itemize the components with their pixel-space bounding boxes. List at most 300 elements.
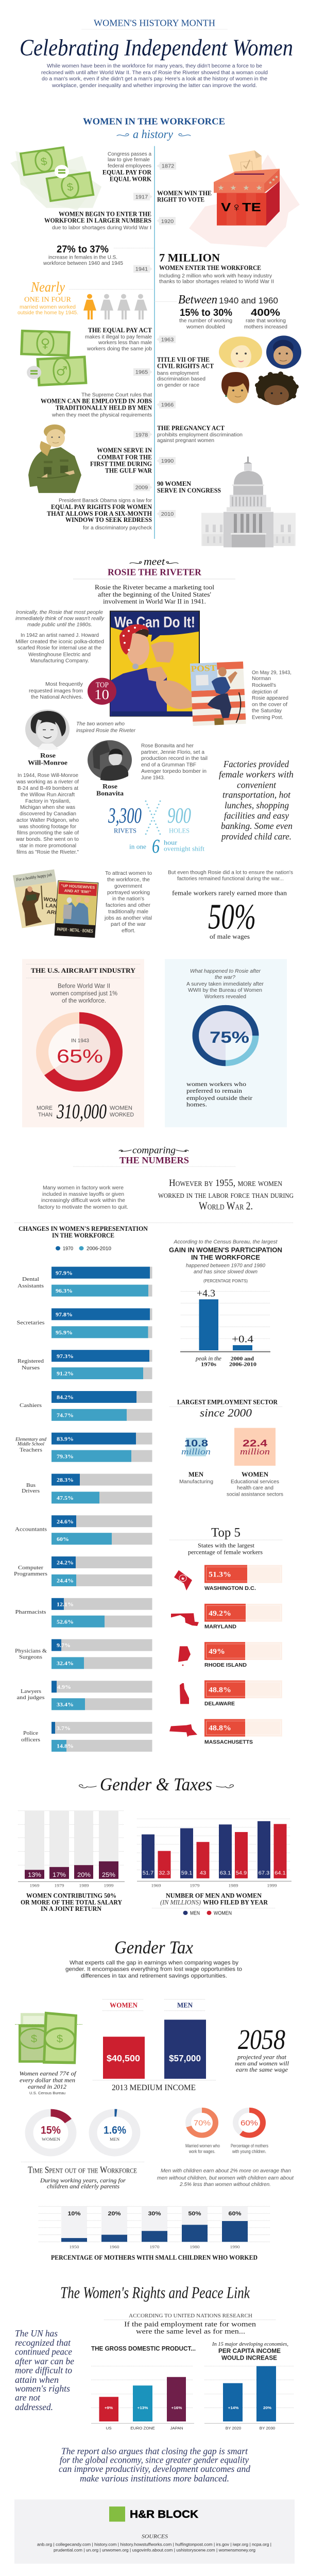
- text: attract women: the workforce, the: [107, 877, 150, 883]
- quote: un peace: attain when: [15, 2375, 59, 2385]
- bars: accountants: 60%: [57, 1536, 69, 1543]
- icon: capitol building: [201, 456, 296, 547]
- stat: men 10.8 million: Manufacturing: [179, 1479, 213, 1485]
- text: attract women: effort.: [122, 928, 135, 934]
- heading: gender tax: gender. It encompasses everything from lost wage opportunities to: [65, 1965, 242, 1973]
- chart: mothers who worked: 10%: [67, 2210, 81, 2217]
- chart: median income: 2013 MEDIUM INCOME: [112, 2083, 196, 2092]
- quote: factories: banking. Some even: [221, 821, 293, 831]
- timeline 2009: 90 WOMEN: [157, 480, 192, 487]
- chart: men and women filing: 54.9: [236, 1870, 247, 1876]
- heading: women in the workforce: [83, 116, 225, 141]
- text: national archives: requested images from: [29, 688, 83, 694]
- state: massachusetts: 48.8%: [209, 1724, 231, 1733]
- heading: meet rosie the riveter: Rosie the Riveter became a marketing tool: [95, 584, 214, 591]
- section: top 5 states: [169, 1525, 282, 1745]
- chart: participation gain: 2006-2010: [229, 1362, 256, 1367]
- timeline 1978: prohibits employment discrimination: [157, 432, 243, 438]
- sources: [37, 2534, 271, 2552]
- legend: WOMEN: [214, 1910, 232, 1916]
- bars: bus drivers: [22, 1474, 152, 1503]
- bio: rose will-monroe: war bonds. She went on to: [15, 837, 79, 842]
- quote: however by 1955: World War 2.: [199, 1200, 253, 1212]
- bars: registered nurses: 91.2%: [57, 1371, 74, 1377]
- timeline 1963: 1963: [161, 337, 174, 343]
- stat: rivets and holes: 900: [167, 804, 191, 828]
- bio: rose bonavita: June 1943.: [141, 775, 165, 781]
- text: factory layoffs: increasingly difficult work within the: [41, 1197, 125, 1204]
- bio: rose will-monroe: was shooting footage for: [19, 824, 76, 829]
- stat: rivets and holes: HOLES: [169, 827, 190, 834]
- panel text: [186, 968, 264, 999]
- donut: 70 percent: [185, 2110, 220, 2155]
- icon: equal money: $: [40, 156, 48, 168]
- poster: up housewives: [55, 880, 98, 938]
- panel result text: preferred to remain: [186, 1088, 243, 1094]
- panel text: Workers revealed: [204, 994, 246, 999]
- bio: rose will-monroe: films promoting the sale of: [17, 830, 79, 836]
- icon: equal money: $: [66, 181, 74, 193]
- bio: rose will-monroe: the Willow Run Aircraft: [21, 792, 75, 798]
- bars: bus drivers: 28.3%: [57, 1478, 74, 1483]
- chart: gross domestic product: JAPAN: [170, 2426, 183, 2431]
- stat: rivets and holes: 3,300: [108, 804, 142, 828]
- chart: gross domestic product: +13%: [138, 2405, 148, 2410]
- chart: participation gain: 2000 and: [231, 1356, 254, 1362]
- text: ironically: scarfed Rosie for internal use at the: [18, 645, 101, 651]
- heading: meet rosie the riveter: [73, 555, 235, 605]
- chart: women contributing 50 percent: 1969: [30, 1883, 40, 1888]
- stat: women 22.4 million: [227, 1428, 283, 1498]
- text: men with children: men without children, but women with children earn about: [157, 2175, 294, 2181]
- chart: women contributing 50 percent: 20%: [77, 1872, 91, 1878]
- stat: women 22.4 million: 22.4: [243, 1438, 267, 1449]
- logo: h and r block: [109, 2506, 198, 2521]
- timeline 1920: due to labor shortages during World War I: [52, 225, 151, 231]
- chart: men and women filing: 63.1: [220, 1870, 231, 1876]
- panel text: women comprised just 1%: [50, 990, 117, 997]
- intro text: reckoned with until after World War II. The era of Rosie the Riveter showed that a woman could: [41, 70, 268, 76]
- poster: up housewives: PAPER · METAL · BONES: [57, 927, 93, 934]
- bars: police officers: officers: [21, 1737, 41, 1743]
- stat: 50 percent of male wages: of male wages: [210, 933, 250, 940]
- timeline 1966: WOMEN CAN BE EMPLOYED IN JOBS: [41, 397, 152, 404]
- poster: we can do it: We Can Do It!: [114, 614, 195, 631]
- heading: comparing the numbers: THE NUMBERS: [119, 1156, 189, 1166]
- quote: un peace: after war can be: [15, 2357, 74, 2366]
- panel: aircraft industry: [22, 959, 144, 1127]
- chart: mothers who worked: 20%: [108, 2210, 121, 2217]
- quote: factories: convenient: [237, 780, 277, 790]
- icon: ballot box: ★: [230, 184, 237, 192]
- text: national archives: the National Archives.: [31, 694, 83, 700]
- chart: mothers who worked: [39, 2207, 270, 2261]
- poster: women's land army: For a healthy happy job: [15, 872, 53, 882]
- donut: 75 percent: 75%: [210, 1028, 249, 1046]
- bars: physicians and surgeons: [15, 1639, 152, 1669]
- stat: between 1940 and 1960: 400%: [251, 308, 280, 318]
- stat: 7 million: [159, 251, 274, 284]
- quote: un peace: recognized that: [15, 2338, 71, 2348]
- timeline 1966: when they meet the physical requirements: [52, 412, 152, 418]
- donut: women 15 percent: [29, 2113, 72, 2153]
- donut: men 1.6 percent: 1.6%: [104, 2124, 126, 2136]
- text: 77 cents: earned in 2012: [28, 2083, 66, 2090]
- timeline 1872: Congress passes a: [108, 151, 152, 157]
- text: attract women: in the nation's: [112, 896, 144, 902]
- intro text: do a man's work, even if she didn't get a man's pay. Here's a look at the history of women in the: [42, 76, 267, 82]
- chart: mothers who worked: PERCENTAGE OF MOTHERS WITH SMALL CHILDREN WHO WORKED: [51, 2254, 258, 2261]
- state: delaware: 48.8%: [209, 1686, 231, 1694]
- chart: participation gain: peak in the: [195, 1355, 221, 1362]
- bars: computer programmers: Computer: [18, 1565, 43, 1571]
- timeline 1990: WOMEN SERVE IN: [97, 447, 152, 454]
- bars: physicians and surgeons: Surgeons: [19, 1654, 43, 1660]
- chart: women contributing 50 percent: 25%: [102, 1872, 115, 1878]
- poster: up housewives: "UP HOUSEWIVES: [61, 884, 95, 890]
- badge: top 10: 10: [94, 687, 109, 703]
- chart: mothers who worked: 30%: [148, 2210, 161, 2217]
- heading: gender tax: What experts call the gap in earnings when comparing wages by: [70, 1959, 238, 1966]
- heading: comparing the numbers: [73, 1145, 235, 1166]
- stat: 310,000 women: THAN: [38, 1112, 53, 1118]
- date tag 1872: [157, 162, 176, 170]
- bars: dental assistants: Dental: [22, 1277, 39, 1282]
- icon: ballot box: ★: [271, 178, 276, 182]
- bars: registered nurses: Nurses: [22, 1365, 40, 1371]
- quote: closing the gap: [59, 2446, 251, 2483]
- timeline 1917: [133, 189, 212, 204]
- bio: rose will-monroe: actor Walter Pidgeon, who: [16, 817, 79, 823]
- donut: 60 percent: [231, 2110, 268, 2155]
- text: rockwell: Evening Post.: [252, 715, 283, 720]
- bars: lawyers and judges: Lawyers: [21, 1689, 42, 1694]
- donut: men 1.6 percent: MEN: [110, 2137, 120, 2142]
- chart: mothers who worked: 60%: [228, 2210, 242, 2217]
- chart: men and women filing: [137, 1819, 291, 1916]
- stat: 50 percent of male wages: female workers rarely earned more than: [172, 889, 287, 896]
- poster: we can do it: [110, 611, 200, 717]
- cover: saturday evening post: [190, 662, 246, 726]
- bio: rose bonavita: Rose Bonavita and her: [141, 743, 194, 749]
- stat: between 1940 and 1960: 1940 and 1960: [219, 296, 278, 306]
- header: [20, 18, 293, 89]
- heading: meet rosie the riveter: meet: [144, 555, 165, 567]
- bars: computer programmers: 24.4%: [57, 1578, 74, 1584]
- timeline 1966: [41, 392, 176, 418]
- quote: factories: lunches, shopping: [225, 801, 289, 810]
- timeline 1917: RIGHT TO VOTE: [157, 196, 204, 204]
- bars: accountants: [15, 1515, 152, 1545]
- text: gain in participation: GAIN IN WOMEN'S PARTICIPATION: [169, 1246, 282, 1253]
- text: un research: were the same level as for men...: [136, 2328, 245, 2335]
- bars: dental assistants: 96.3%: [56, 1289, 73, 1294]
- stat: rivets and holes: RIVETS: [114, 827, 136, 834]
- quote: factories: provided child care.: [220, 832, 291, 841]
- text: ironically: Miller created the iconic polka-dotted: [15, 639, 104, 645]
- heading: meet rosie the riveter: ROSIE THE RIVETER: [108, 567, 202, 578]
- stat: between 1940 and 1960: women doubled: [186, 324, 225, 330]
- intro text: workplace, gender inequality and whether improving the latter can improve the world.: [52, 82, 257, 89]
- poster: women's land army: [13, 868, 75, 928]
- bars: teachers: Middle School: [17, 1442, 44, 1447]
- sources: prudential.com | un.org | unwomen.org | usgovinfo.about.com | ushistoryscene.com | womensmoney.org: [54, 2548, 255, 2552]
- bio: rose bonavita: partner, Jennie Florio, set a: [141, 749, 205, 755]
- section heading: LARGEST EMPLOYMENT SECTOR: [177, 1398, 278, 1406]
- stat: 310,000 women: WORKED: [110, 1112, 134, 1118]
- timeline 1990: FIRST TIME DURING: [90, 460, 152, 467]
- timeline 1963: [85, 326, 176, 352]
- heading: women in the workforce: WOMEN IN THE WORKFORCE: [83, 116, 225, 126]
- donut: 70 percent: 70%: [194, 2119, 211, 2128]
- panel: after the war: [165, 959, 287, 1127]
- legend: 2006-2010: [87, 1246, 111, 1251]
- section heading: percentage of female workers: [188, 1549, 263, 1555]
- bio: rose will-monroe: Factory in Ypsilanti,: [25, 798, 71, 804]
- quote: closing the gap: can improve productivity, development outcomes and: [59, 2464, 251, 2474]
- stat: men 10.8 million: 10.8: [184, 1438, 208, 1449]
- bars: police officers: Police: [23, 1730, 38, 1736]
- text: gain in participation: and has since slowed down: [194, 1269, 258, 1275]
- chart: median income: [93, 1999, 216, 2092]
- heading: gender and taxes: Gender & Taxes: [100, 1775, 212, 1794]
- chart: per capita income: BY 2030: [260, 2426, 275, 2431]
- icon: ballot box: ★: [274, 175, 279, 180]
- panel result text: [186, 1081, 253, 1108]
- bars: teachers: 83.9%: [57, 1436, 74, 1442]
- bio: rose will-monroe: In 1944, Rose Will-Monroe: [18, 773, 78, 778]
- quote: factories: transportation, hot: [222, 790, 291, 800]
- text: rockwell: depiction of: [252, 689, 278, 695]
- chart: men and women filing: 32.3: [159, 1870, 170, 1876]
- badge: top 10: TOP: [96, 681, 109, 689]
- bars: accountants: Accountants: [15, 1527, 47, 1532]
- timeline axis: [154, 146, 155, 539]
- chart: gross domestic product: +16%: [171, 2405, 182, 2410]
- donut: 70 percent: Married women who: [185, 2143, 220, 2149]
- text: un research: [104, 2313, 276, 2335]
- text: factory layoffs: Many women in factory work were: [43, 1185, 124, 1191]
- timeline 1872: EQUAL PAY FOR: [102, 168, 152, 176]
- panel text: [50, 982, 117, 1004]
- stat: 7 million: 7 MILLION: [159, 251, 220, 264]
- heading: rights and peace link: The Women's Rights and Peace Link: [60, 2284, 250, 2302]
- stat: 2058: earn the same wage: [236, 2066, 288, 2073]
- bio: rose bonavita: Bonavita: [96, 790, 124, 797]
- quote: un peace: continued peace: [15, 2347, 72, 2357]
- quote: un peace: addressed.: [15, 2402, 53, 2412]
- bars: bus drivers: Bus: [26, 1483, 36, 1488]
- stat: nearly one in four: outside the home by 1945.: [18, 310, 78, 316]
- sources: SOURCES: [142, 2534, 168, 2539]
- legend: [56, 1246, 111, 1251]
- chart: participation gain: 1970s: [201, 1362, 217, 1367]
- heading: meet rosie the riveter: after the beginning of the United States': [98, 590, 211, 598]
- quote: however by 1955: [158, 1178, 294, 1212]
- icon: woman soldier: [28, 425, 81, 493]
- donut: women 15 percent: WOMEN: [42, 2137, 61, 2142]
- chart: per capita income: 20%: [263, 2405, 271, 2410]
- bio: rose bonavita: Rose: [102, 783, 117, 790]
- stat: 310,000 women: 310,000: [56, 1100, 107, 1123]
- intro text: [41, 63, 268, 89]
- stat: between 1940 and 1960: Between: [178, 293, 217, 307]
- chart: median income: MEN: [177, 2002, 193, 2009]
- text: rockwell: Norman: [252, 676, 271, 682]
- timeline 1978: THE PREGNANCY ACT: [157, 424, 225, 432]
- stat: 2058: men and women will: [235, 2060, 289, 2067]
- timeline 1872: law to give female: [108, 157, 150, 163]
- chart title: [19, 1225, 148, 1239]
- bio: rose will-monroe: was working as a riveter of: [16, 779, 79, 785]
- text: rockwell: [252, 670, 291, 720]
- donut: 65 percent: IN 1943: [71, 1038, 89, 1044]
- text: 77 cents: Women earned 77¢ of: [20, 2070, 77, 2077]
- stat: nearly one in four: [18, 279, 153, 319]
- text: gain in participation: IN THE WORKFORCE: [191, 1253, 260, 1261]
- stat: 2058: projected year that: [237, 2054, 287, 2060]
- timeline 2010: WINDOW TO SEEK REDRESS: [65, 516, 152, 523]
- donut: 60 percent: Percentage of mothers: [231, 2143, 268, 2149]
- chart: mothers who worked: 1960: [110, 2245, 119, 2249]
- cover: saturday evening post: POST: [191, 663, 217, 673]
- text: men with children: Men with children earn about 2% more on average than: [161, 2168, 291, 2174]
- chart caption: OR MORE OF THE TOTAL SALARY: [21, 1899, 123, 1906]
- text: factory layoffs: included in massive layoffs or given: [42, 1191, 124, 1197]
- icon: four women's faces: [219, 335, 301, 405]
- panel text: Before World War II: [58, 982, 110, 989]
- chart: men and women filing: 51.7: [143, 1870, 153, 1876]
- chart: gross domestic product: US: [106, 2426, 112, 2431]
- stat: women 22.4 million: Educational services: [231, 1479, 279, 1485]
- icon: ballot box: ★: [268, 180, 272, 185]
- state: maryland: [171, 1604, 282, 1630]
- state: washington dc: [174, 1565, 282, 1591]
- stat: between 1940 and 1960: mothers increased: [244, 324, 287, 330]
- timeline 1963: workers doing the same job: [87, 346, 152, 352]
- bars: teachers: Elementary and: [15, 1437, 46, 1442]
- bars: physicians and surgeons: 9.7%: [57, 1643, 71, 1649]
- text: ironically: Manufacturing Company.: [30, 658, 89, 664]
- stat: rivets and holes: in one: [129, 843, 146, 851]
- poster: up housewives: AND AT 'EM!": [64, 888, 91, 894]
- stat: 7 million: WOMEN ENTER THE WORKFORCE: [159, 264, 261, 272]
- quote: un peace: more difficult to: [15, 2365, 72, 2375]
- sources: anb.org | collegecandy.com | history.com | history.howstuffworks.com | huffingtonpost.com | irs.gov | iwpr.org | ncpa.org |: [37, 2542, 271, 2547]
- chart: men and women filing: 1989: [229, 1883, 238, 1888]
- chart: per capita income: In 15 major developing economies,: [212, 2342, 288, 2347]
- quote: un peace: The UN has: [15, 2329, 58, 2338]
- bars: lawyers and judges: [16, 1681, 152, 1710]
- chart: participation gain: +4.3: [197, 1287, 215, 1299]
- bars: physicians and surgeons: 32.4%: [57, 1661, 74, 1667]
- timeline 1978: [133, 424, 243, 444]
- chart: men and women filing: 43: [200, 1870, 206, 1876]
- chart caption: (IN MILLIONS): [160, 1899, 201, 1906]
- chart: men and women filing: 64.1: [274, 1870, 286, 1876]
- chart: mothers who worked: 50%: [188, 2210, 201, 2217]
- icon: ballot box: ★: [217, 184, 225, 192]
- quote: closing the gap: for the global economy, since greater gender equality: [60, 2455, 249, 2465]
- chart: median income: WOMEN: [110, 2002, 138, 2009]
- bars: lawyers and judges: 33.4%: [57, 1702, 74, 1708]
- stat: 50 percent of male wages: factories remained functional during the war...: [177, 876, 284, 882]
- caption: two women: The two women who: [76, 721, 125, 727]
- chart title: IN THE WORKFORCE: [52, 1231, 114, 1239]
- state: washington dc: WASHINGTON D.C.: [204, 1586, 256, 1591]
- stat: women 22.4 million: million: [240, 1447, 270, 1456]
- chart: men and women filing: 1999: [267, 1883, 277, 1888]
- timeline 2010: EQUAL PAY RIGHTS FOR WOMEN: [51, 503, 152, 511]
- text: attract women: traditionally male: [108, 909, 148, 914]
- bars: dental assistants: 97.9%: [56, 1270, 73, 1276]
- bars: computer programmers: [14, 1556, 152, 1586]
- date tag 1941: 1941: [135, 266, 148, 273]
- timeline 1963: workers less than male: [98, 340, 152, 346]
- text: men with children: [157, 2168, 294, 2188]
- bars: teachers: 79.3%: [57, 1454, 74, 1460]
- chart: women contributing 50 percent: 1979: [55, 1883, 64, 1888]
- legend: MEN: [190, 1910, 200, 1916]
- text: gain in participation: (PERCENTAGE POINTS): [203, 1279, 248, 1283]
- text: attract women: portrayed working: [107, 890, 150, 895]
- timeline 2010: 2010: [161, 511, 174, 517]
- bars: bus drivers: 47.5%: [57, 1495, 74, 1501]
- text: un research: ACCORDING TO UNITED NATIONS RESEARCH: [129, 2313, 252, 2319]
- bars: secretaries: Secretaries: [16, 1320, 45, 1326]
- text: gain in participation: According to the Census Bureau, the largest: [174, 1239, 278, 1245]
- bio: rose will-monroe: B-24 and B-49 bombers at: [18, 785, 78, 791]
- timeline 1920: WORKFORCE IN LARGER NUMBERS: [44, 217, 151, 224]
- bars: lawyers and judges: and judges: [16, 1695, 45, 1701]
- section heading: Top 5: [211, 1525, 241, 1539]
- chart: participation gain: [180, 1287, 270, 1367]
- panel text: of the workforce.: [62, 997, 106, 1004]
- bars: police officers: 14.8%: [57, 1743, 74, 1750]
- bars: pharmacists: 52.6%: [57, 1619, 74, 1625]
- timeline 1872: EQUAL WORK: [110, 175, 151, 182]
- panel result text: homes.: [186, 1101, 207, 1108]
- stat: nearly one in four: Nearly: [30, 279, 65, 295]
- timeline 1920: 1920: [161, 218, 174, 225]
- bio: rose bonavita: Avenger torpedo bomber in: [141, 768, 207, 774]
- text: attract women: jobs as another vital: [104, 915, 152, 921]
- state: delaware: [180, 1680, 282, 1707]
- icon: gender money: ♀: [40, 336, 50, 350]
- text: factory layoffs: factory to motivate the women to quit.: [38, 1204, 128, 1210]
- text: factory layoffs: [38, 1185, 128, 1210]
- bio: rose will-monroe: discovered by Canadian: [20, 811, 76, 817]
- timeline 1990: THE GULF WAR: [105, 467, 152, 474]
- chart: per capita income: [204, 2342, 294, 2431]
- bio: rose bonavita: production record in the tail: [141, 756, 208, 761]
- bars: pharmacists: Pharmacists: [15, 1609, 46, 1615]
- bars: cashiers: 74.7%: [57, 1413, 74, 1418]
- timeline 1917: 1917: [135, 194, 148, 200]
- heading: gender tax: Gender Tax: [114, 1938, 193, 1957]
- text: attract women: government: [114, 883, 142, 889]
- stat: between 1940 and 1960: rate that working: [246, 318, 286, 324]
- chart caption: IN A JOINT RETURN: [41, 1905, 102, 1912]
- stat: nearly one in four: ONE IN FOUR: [24, 296, 71, 303]
- chart: women contributing 50 percent: 17%: [53, 1872, 66, 1878]
- text: ironically: In 1942 an artist named J. Howard: [21, 632, 99, 638]
- timeline 1963: makes it illegal to pay female: [85, 334, 152, 340]
- panel text: A survey taken immediately after: [186, 981, 264, 987]
- timeline 1965: CIVIL RIGHTS ACT: [157, 362, 214, 370]
- icon: ballot box: [189, 150, 300, 247]
- chart: gross domestic product: EURO ZONE: [130, 2426, 155, 2431]
